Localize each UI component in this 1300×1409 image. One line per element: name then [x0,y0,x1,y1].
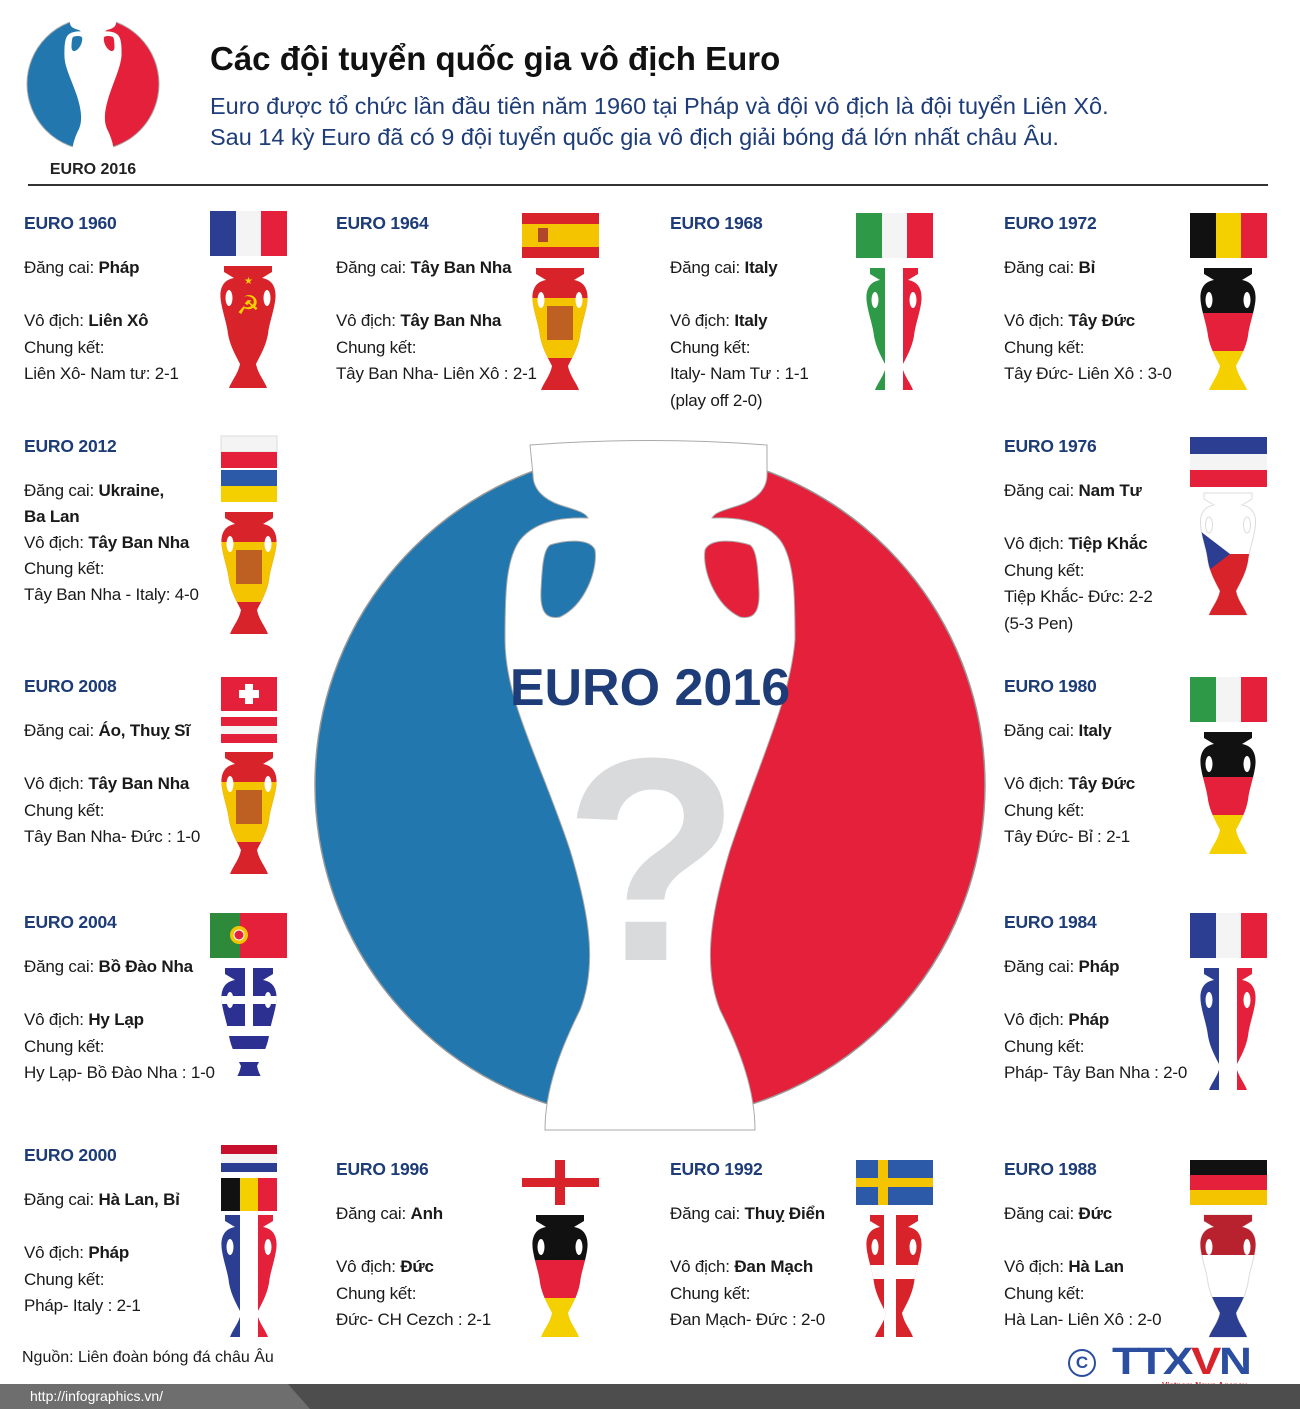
entry: euro 1964: EURO 1964 [336,213,429,233]
entry: euro 2000 [24,1145,180,1315]
flag: belgium [1190,213,1267,258]
title: Các đội tuyển quốc gia vô địch Euro [210,40,780,77]
trophy: denmark [866,1215,922,1337]
entry: euro 2004: EURO 2004 [24,912,117,932]
entry: euro 1988 [1004,1159,1161,1329]
entry: euro 2004: Chung kết: [24,1036,104,1056]
entry: euro 1972: EURO 1972 [1004,213,1097,233]
entry: euro 1980: Tây Đức- Bỉ : 2-1 [1004,827,1130,846]
entry: euro 1996: Đăng cai: Anh [336,1204,443,1223]
logo: ttxvn: TTXVN [1112,1341,1250,1383]
trophy: spain [221,512,277,634]
trophy: italy [866,268,922,390]
entry: euro 1964 [336,213,537,383]
trophy: czechoslovakia [1200,492,1256,616]
entry: euro 2012: Đăng cai: Ukraine, [24,481,164,500]
entry: euro 2008 [24,676,200,846]
entry: euro 1972: Tây Đức- Liên Xô : 3-0 [1004,364,1172,383]
trophy: germany [1200,268,1256,390]
trophy: france [221,1215,277,1337]
entry: euro 2012: Chung kết: [24,559,104,578]
entry: euro 1988: EURO 1988 [1004,1159,1097,1179]
entry: euro 1964: Chung kết: [336,338,416,356]
flag: switzerland + austria [221,677,277,743]
entry: euro 1976: Đăng cai: Nam Tư [1004,481,1142,500]
entry: euro 1960: Đăng cai: Pháp [24,258,139,277]
central graphic: euro 2016 trophy circle: EURO 2016 [510,659,790,717]
logo: euro 2016 [26,22,160,178]
entry: euro 1972: Vô địch: Tây Đức [1004,311,1135,330]
footer bar [0,1384,1300,1409]
flag: england [522,1160,599,1205]
flag: portugal [210,913,287,958]
entry: euro 1964: Đăng cai: Tây Ban Nha [336,258,511,277]
entry: euro 1984: Chung kết: [1004,1036,1084,1056]
entry: euro 1960: Chung kết: [24,338,104,356]
entry: euro 1992: Đăng cai: Thuỵ Điển [670,1204,825,1223]
entry: euro 2012: Vô địch: Tây Ban Nha [24,533,189,552]
flag: france [210,211,287,256]
entry: euro 1960: Vô địch: Liên Xô [24,311,148,330]
subtitle: Euro được tổ chức lần đầu tiên năm 1960 tại Pháp và đội vô địch là đội tuyển Liên Xô. [210,93,1109,119]
entry: euro 1972: Chung kết: [1004,338,1084,356]
entry: euro 1996: Vô địch: Đức [336,1257,434,1276]
entry: euro 1968: Chung kết: [670,338,750,356]
entry: euro 1996: EURO 1996 [336,1159,429,1179]
entry: euro 1960: Liên Xô- Nam tư: 2-1 [24,364,179,383]
text: Vietnam News Agency [1162,1381,1247,1390]
central graphic: euro 2016 trophy circle: ? [563,698,741,1022]
entry: euro 1980 [1004,676,1135,846]
source note: Nguồn: Liên đoàn bóng đá châu Âu [22,1349,274,1366]
entry: euro 2004 [24,912,215,1082]
trophy: germany [532,1215,588,1337]
flag: spain [522,213,599,258]
entry: euro 1968: Vô địch: Italy [670,311,767,330]
entry: euro 2008: Tây Ban Nha- Đức : 1-0 [24,827,200,846]
entry: euro 2008: Đăng cai: Áo, Thuỵ Sĩ [24,721,190,740]
entry: euro 1960: EURO 1960 [24,213,117,233]
flag: sweden [856,1160,933,1205]
entry: euro 1996 [336,1159,491,1329]
entry: euro 2008: EURO 2008 [24,676,117,696]
footer bar: http://infographics.vn/ [30,1388,163,1404]
entry: euro 1984: Đăng cai: Pháp [1004,957,1119,976]
entry: euro 1992: EURO 1992 [670,1159,763,1179]
entry: euro 1980: Đăng cai: Italy [1004,721,1112,740]
entry: euro 1988: Hà Lan- Liên Xô : 2-0 [1004,1310,1161,1329]
entry: euro 2000: Vô địch: Pháp [24,1243,129,1262]
flag: yugoslavia [1190,437,1267,487]
entry: euro 1984: Pháp- Tây Ban Nha : 2-0 [1004,1063,1187,1082]
entry: euro 2000: EURO 2000 [24,1145,117,1165]
entry: euro 2000: Chung kết: [24,1270,104,1288]
trophy: ussr: ☭ [236,290,260,320]
flag: poland + ukraine [220,436,278,502]
entry: euro 1984: Vô địch: Pháp [1004,1010,1109,1029]
trophy: germany [1200,732,1256,854]
entry: euro 2012 [24,436,199,604]
entry: euro 1972 [1004,213,1172,383]
entry: euro 1984: EURO 1984 [1004,912,1097,932]
entry: euro 1976: (5-3 Pen) [1004,614,1073,632]
entry: euro 1980: Vô địch: Tây Đức [1004,774,1135,793]
entry: euro 1964: Tây Ban Nha- Liên Xô : 2-1 [336,364,537,383]
entry: euro 2004: Vô địch: Hy Lạp [24,1010,144,1029]
logo: ttxvn [1068,1341,1250,1390]
entry: euro 1996: Đức- CH Cezch : 2-1 [336,1310,491,1329]
entry: euro 2008: Chung kết: [24,800,104,820]
entry: euro 2004: Hy Lạp- Bồ Đào Nha : 1-0 [24,1063,215,1082]
entry: euro 1996: Chung kết: [336,1284,416,1302]
flag: italy [856,213,933,258]
entry: euro 1976: EURO 1976 [1004,436,1097,456]
trophy: netherlands [1200,1214,1256,1338]
trophy: spain [221,752,277,874]
entry: euro 1976: Chung kết: [1004,560,1084,580]
trophy: spain [532,268,588,390]
flag: germany [1190,1160,1267,1205]
entry: euro 1992: Đan Mạch- Đức : 2-0 [670,1310,825,1329]
entry: euro 2012: Ba Lan [24,507,79,526]
entry: euro 1992: Chung kết: [670,1284,750,1302]
entry: euro 1988: Đăng cai: Đức [1004,1204,1112,1223]
entry: euro 2000: Đăng cai: Hà Lan, Bỉ [24,1190,180,1209]
trophy: greece [221,968,277,1076]
flag: italy [1190,677,1267,722]
entry: euro 1988: Chung kết: [1004,1284,1084,1302]
entry: euro 1976 [1004,436,1153,632]
entry: euro 1992 [670,1159,825,1329]
logo: ttxvn: C [1076,1353,1088,1372]
entry: euro 1984 [1004,912,1187,1082]
entry: euro 1960 [24,213,179,383]
entry: euro 2000: Pháp- Italy : 2-1 [24,1296,141,1315]
flag: netherlands + belgium [221,1145,277,1211]
trophy: ussr: ★ [244,276,253,287]
trophy: france [1200,968,1256,1090]
trophy: ussr [220,266,276,388]
subtitle: Sau 14 kỳ Euro đã có 9 đội tuyển quốc gia vô địch giải bóng đá lớn nhất châu Âu. [210,124,1059,150]
subtitle [210,93,1109,150]
entry: euro 1992: Vô địch: Đan Mạch [670,1257,813,1276]
entry: euro 1976: Vô địch: Tiệp Khắc [1004,534,1148,553]
entry: euro 1968: Đăng cai: Italy [670,258,778,277]
entry: euro 2004: Đăng cai: Bồ Đào Nha [24,957,193,976]
entry: euro 1968: (play off 2-0) [670,390,762,410]
entry: euro 2008: Vô địch: Tây Ban Nha [24,774,189,793]
entry: euro 1980: EURO 1980 [1004,676,1097,696]
entry: euro 1968: Italy- Nam Tư : 1-1 [670,364,809,383]
entry: euro 1976: Tiệp Khắc- Đức: 2-2 [1004,587,1153,606]
entry: euro 2012: EURO 2012 [24,436,117,456]
logo: euro 2016: EURO 2016 [50,161,136,178]
entry: euro 1988: Vô địch: Hà Lan [1004,1257,1124,1276]
entry: euro 1968 [670,213,809,410]
entry: euro 1972: Đăng cai: Bỉ [1004,258,1095,277]
entry: euro 1968: EURO 1968 [670,213,763,233]
flag: france [1190,913,1267,958]
entry: euro 1964: Vô địch: Tây Ban Nha [336,311,501,330]
entry: euro 2012: Tây Ban Nha - Italy: 4-0 [24,585,199,604]
central graphic: euro 2016 trophy circle [314,440,986,1130]
entry: euro 1980: Chung kết: [1004,800,1084,820]
